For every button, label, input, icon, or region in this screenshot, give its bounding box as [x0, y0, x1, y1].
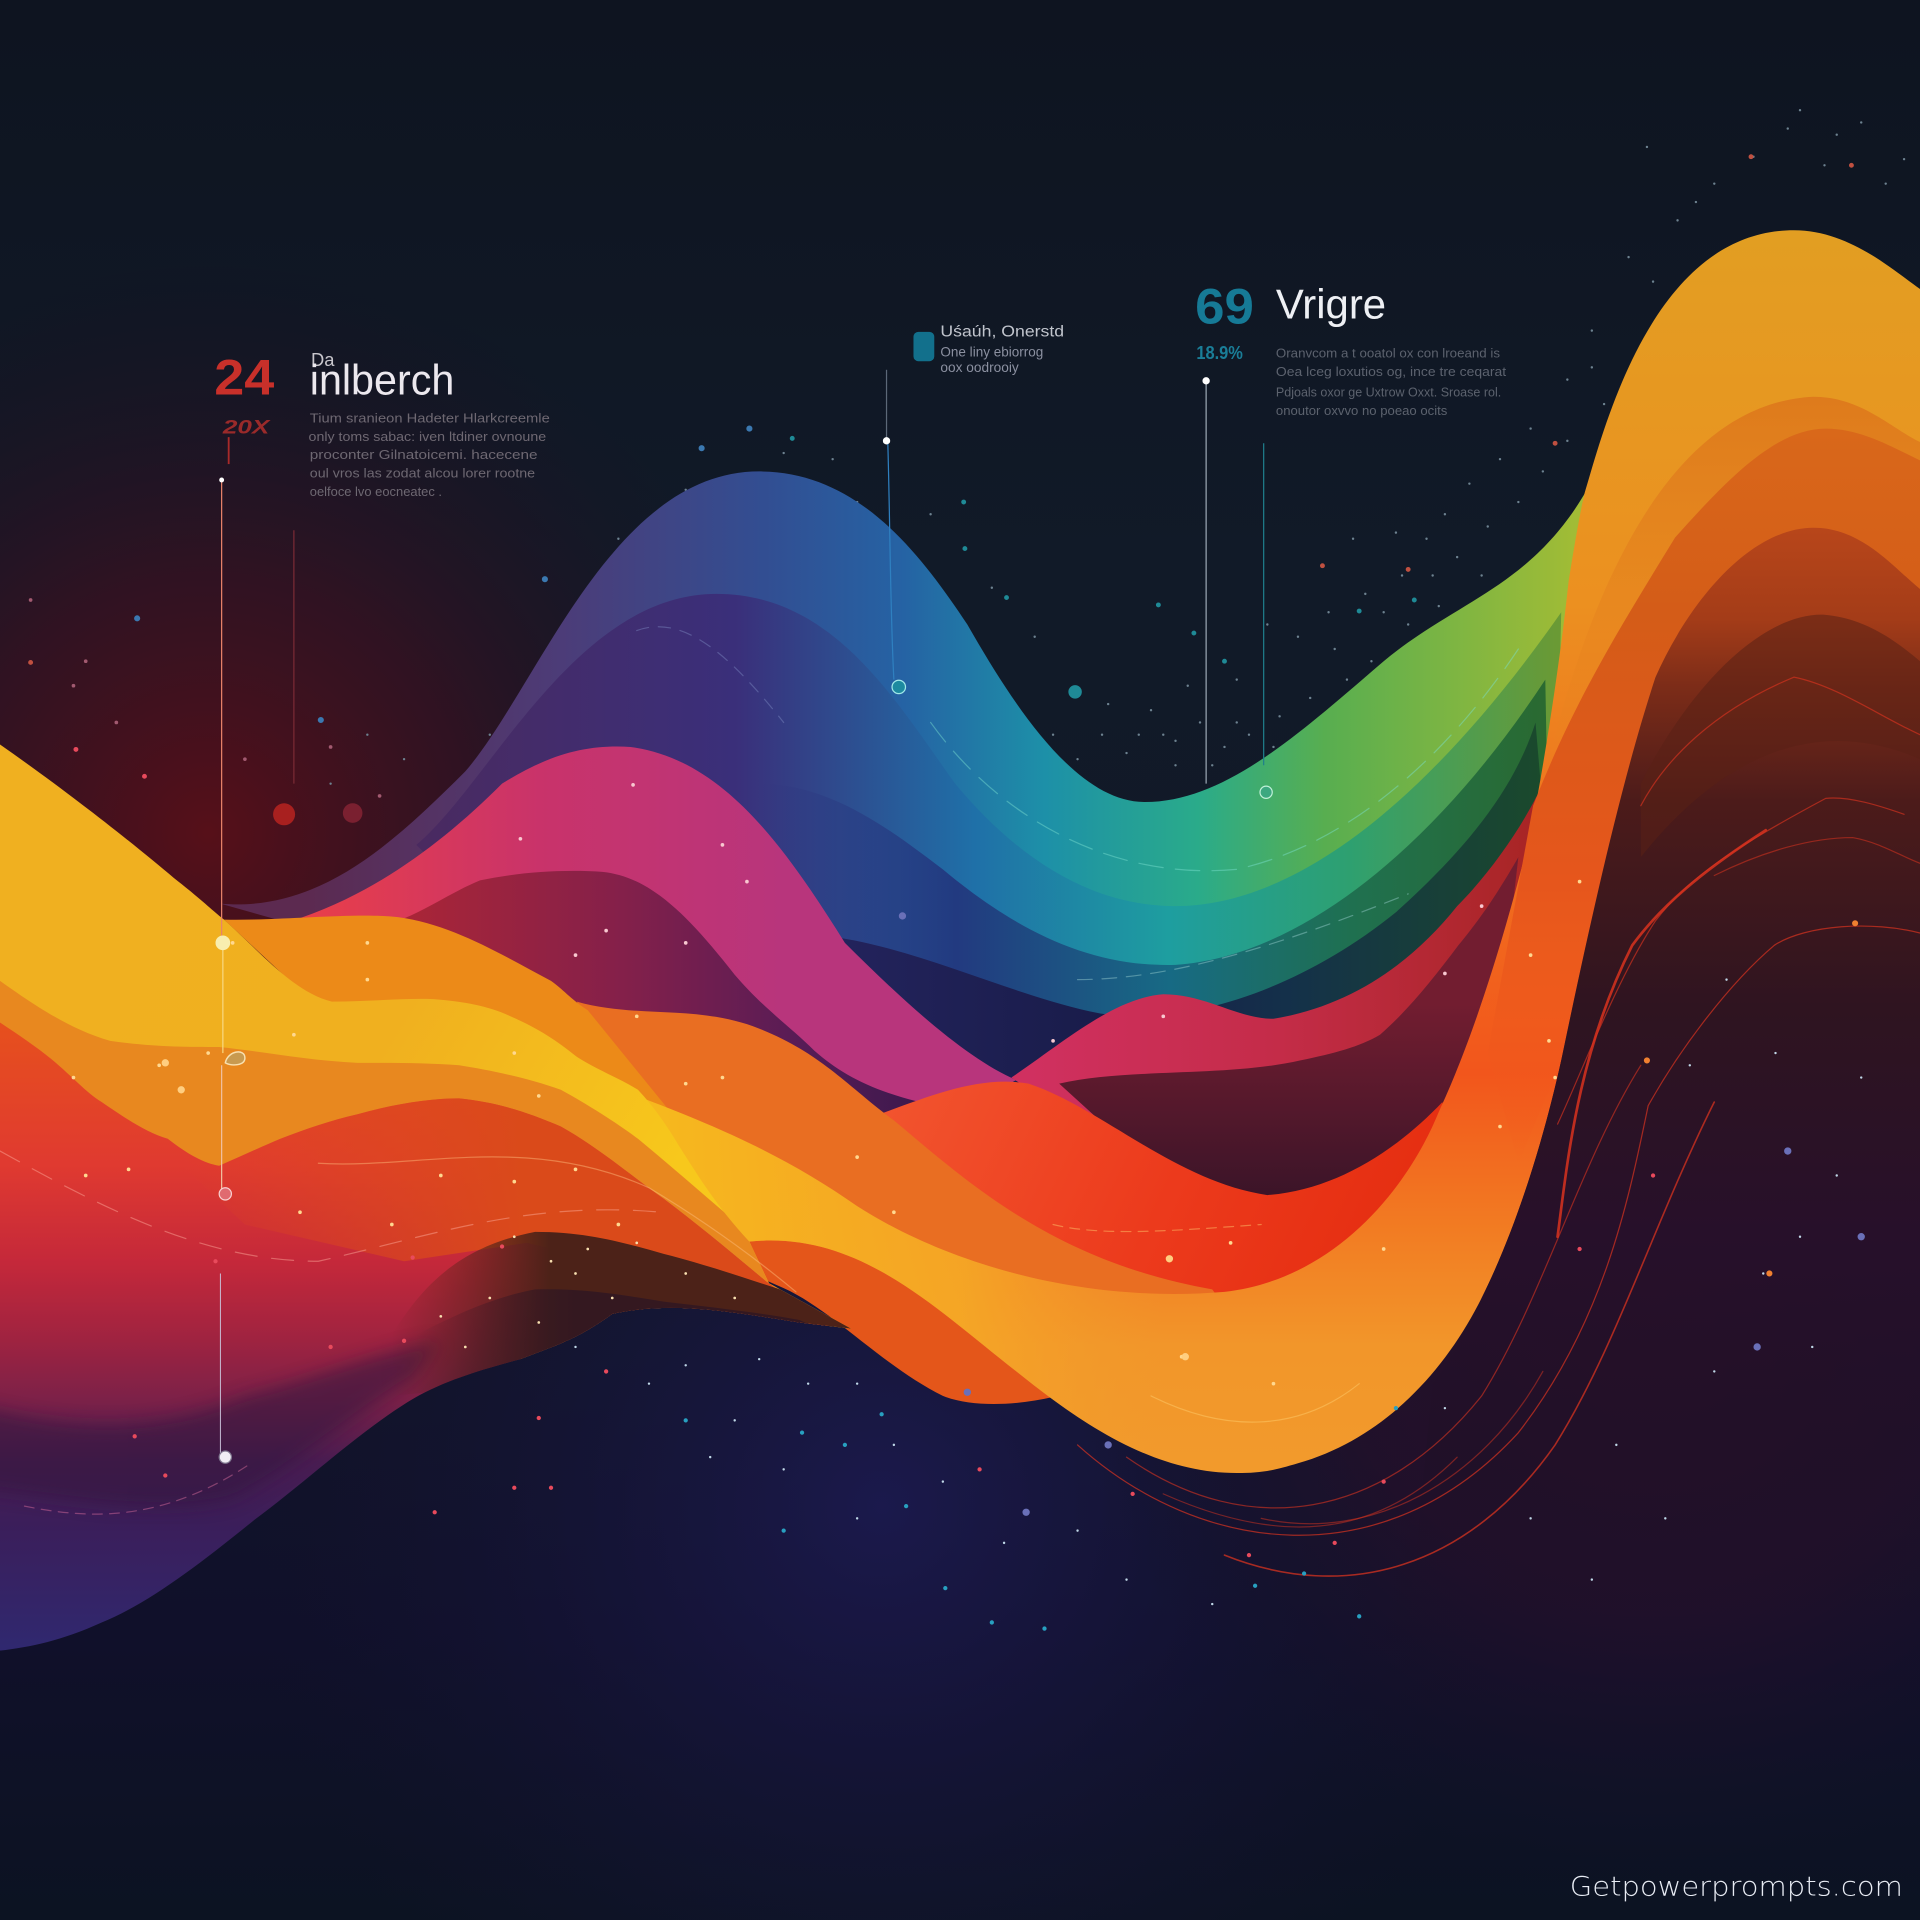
- wave: great orange ribbon: [637, 230, 1920, 1714]
- panel: right callout: [1195, 278, 1507, 418]
- stat: 24: 24: [214, 349, 274, 405]
- small heading: Da: Da: [311, 349, 335, 370]
- wave: crimson right: [1011, 796, 1537, 1249]
- middle body: One liny ebiorrog: [940, 344, 1043, 359]
- panel: left callout: [214, 349, 550, 499]
- panel: middle callout: [913, 324, 1064, 375]
- body text: Oea lceg loxutios og, ince tre ceqarat: [1276, 364, 1507, 379]
- wave: magenta: [279, 747, 1016, 1151]
- ribbon: layer 3: [1488, 429, 1920, 1163]
- wave: upper orange band: [224, 916, 667, 1108]
- layer: crimson crest: [1011, 796, 1537, 1206]
- left mass: brown wedge: [406, 1232, 851, 1393]
- left mass: dark purple stripe: [0, 1341, 441, 1508]
- ribbon: outer: [637, 230, 1920, 1473]
- stat: 18.9%: 18.9%: [1196, 342, 1243, 363]
- body text: only toms sabac: iven ltdiner ovnoune: [309, 429, 546, 444]
- layer: magenta shadow: [404, 871, 949, 1139]
- left mass: darker wedge step: [435, 1289, 807, 1384]
- left mass: red to purple gradient: [0, 1022, 857, 1665]
- heading: Vrigre: Vrigre: [1276, 280, 1386, 327]
- leader lines: right: [1202, 377, 1272, 798]
- watermark: Getpowerprompts.com: [1570, 1872, 1903, 1903]
- layer: magenta crest: [279, 747, 1016, 1151]
- wave: left mass: [0, 722, 882, 1665]
- layer: blue mid: [416, 594, 1561, 1102]
- left mass: gold band: [0, 981, 857, 1347]
- stat: 69: 69: [1195, 278, 1254, 334]
- body text: onoutor oxvvo no poeao ocits: [1276, 403, 1447, 418]
- body text: [1276, 346, 1507, 418]
- wave: orange right band: [577, 1002, 1237, 1322]
- leader line: middle: [883, 370, 906, 694]
- middle heading: Uśaúh, Onerstd: [940, 324, 1064, 341]
- wave: red centre: [879, 1082, 1445, 1347]
- foreground particles: [73, 785, 1861, 1629]
- body text: oul vros las zodat alcou lorer rootne: [310, 466, 535, 481]
- body text: Pdjoals oxor ge Uxtrow Oxxt. Sroase rol.: [1276, 385, 1501, 400]
- middle body: oox oodrooiy: [940, 360, 1019, 375]
- background particles: [31, 110, 1904, 833]
- left mass: orange-red right tone: [282, 1098, 828, 1326]
- wave: lower orange lobe: [722, 1206, 1078, 1404]
- layer: blue deep: [759, 680, 1549, 1102]
- left mass: yellow: [0, 722, 857, 1359]
- body text: [309, 410, 550, 499]
- heading: inlberch: inlberch: [310, 356, 454, 404]
- thin light arcs over waves: [0, 627, 1518, 1514]
- ribbon: layer 4 dark interior: [1408, 528, 1920, 1714]
- stat: 20X: 20X: [222, 416, 272, 438]
- body text: Tium sranieon Hadeter Hlarkcreemle: [310, 410, 550, 425]
- wave: right inner shade: [1641, 615, 1920, 857]
- ribbon: layer 2: [1549, 397, 1920, 931]
- wave: blue to green: [220, 471, 1587, 1102]
- layer: blue outer: [220, 471, 1587, 1102]
- body text: Oranvcom a t ooatol ox con lroeand is: [1276, 346, 1500, 361]
- middle body: [940, 344, 1043, 375]
- body text: oelfoce lvo eocneatec .: [310, 484, 442, 499]
- body text: proconter Gilnatoicemi. hacecene: [310, 447, 538, 462]
- icon: teal marker: [913, 332, 934, 361]
- layer: navy shadow: [833, 722, 1549, 1102]
- layer: crimson shadow: [1059, 857, 1518, 1249]
- leader line: left main: [216, 478, 295, 1463]
- ribbon: yellow left part: [637, 1096, 1237, 1473]
- red arcs right: [1078, 677, 1920, 1576]
- red tick: [228, 437, 230, 464]
